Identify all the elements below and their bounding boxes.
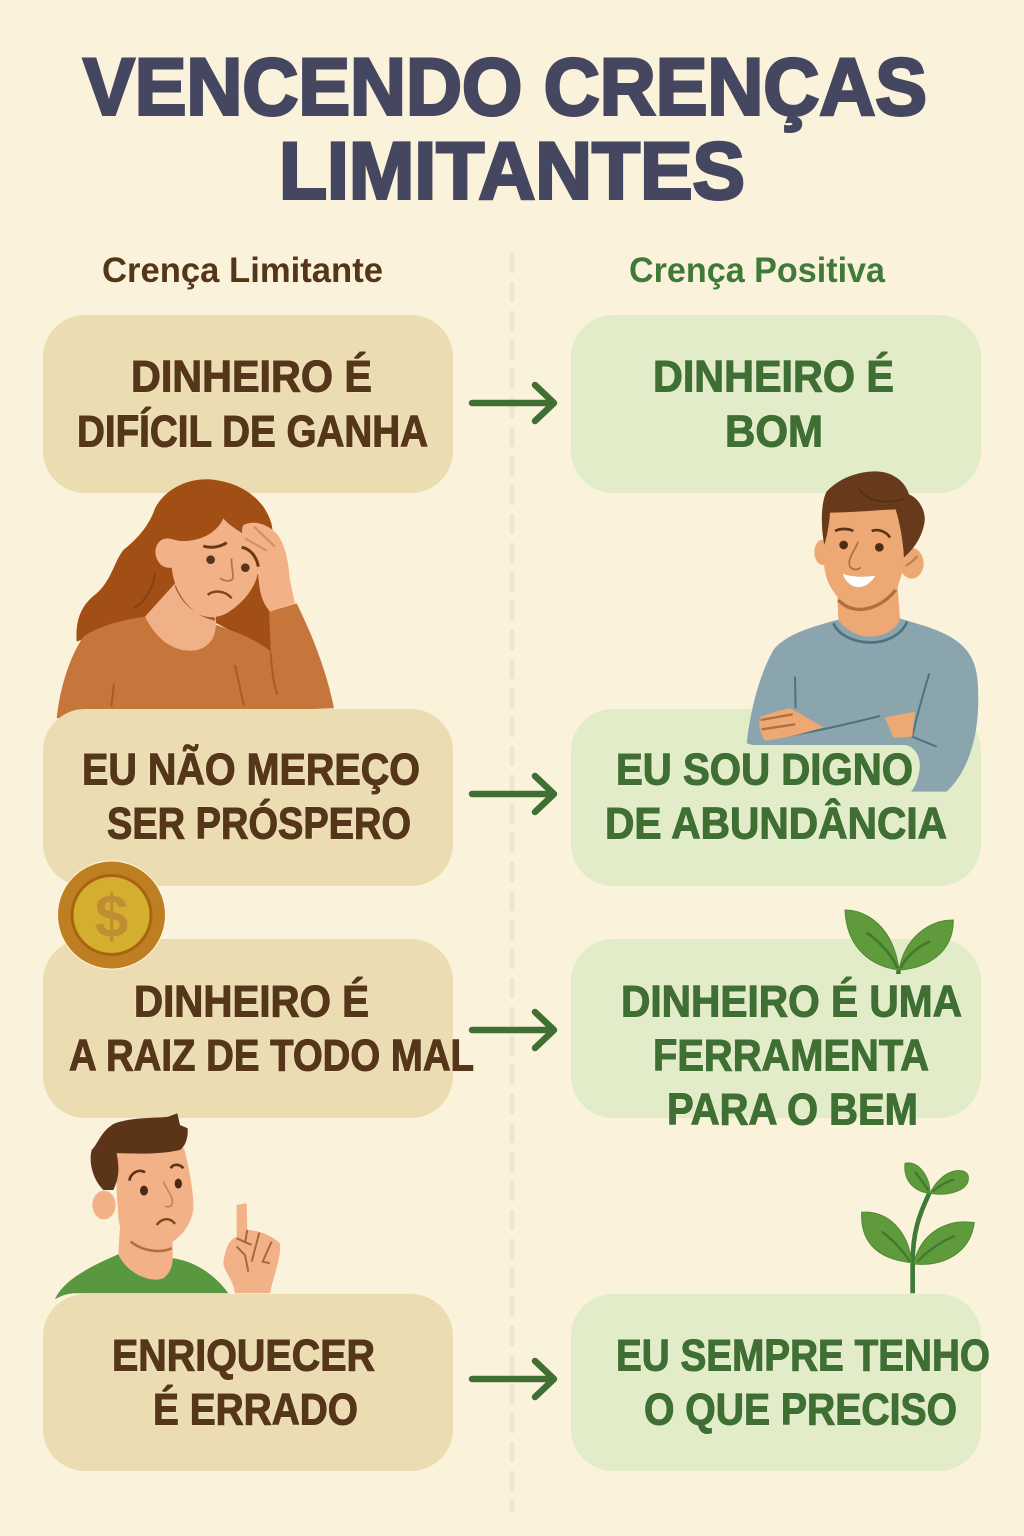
arrow row 1: [472, 385, 554, 421]
illustration: worried woman: [57, 479, 334, 718]
panel: limiting belief 4: É ERRADO: [153, 1384, 358, 1434]
panel: limiting belief 4: [43, 1294, 453, 1471]
panel: positive belief 1: [571, 315, 981, 493]
panel: positive belief 4: [571, 1294, 990, 1471]
heading: limiting belief column: Crença Limitante: [102, 251, 383, 290]
panel: limiting belief 1: DINHEIRO É: [131, 352, 372, 402]
panel: limiting belief 3: [43, 939, 474, 1118]
icon: two leaves: [845, 910, 953, 974]
panel: limiting belief 3: DINHEIRO É: [134, 976, 369, 1026]
arrow row 3: [472, 1012, 554, 1048]
title: [83, 42, 927, 216]
illustration: confident man: [747, 471, 978, 792]
heading: positive belief column: Crença Positiva: [629, 251, 886, 290]
panel: positive belief 1: DINHEIRO É: [653, 352, 894, 402]
icon: sprout: [862, 1163, 974, 1293]
illustration: doubtful man pointing: [55, 1113, 280, 1299]
panel: positive belief 3: [571, 939, 981, 1134]
title: VENCENDO CRENÇAS: [83, 42, 927, 132]
panel: positive belief 3: DINHEIRO É UMA: [621, 976, 962, 1026]
panel: limiting belief 1: [43, 315, 453, 493]
arrow row 2: [472, 776, 554, 812]
icon: gold coin: [58, 861, 166, 969]
panel: limiting belief 2: EU NÃO MEREÇO: [82, 744, 420, 794]
text: positive belief 2: [605, 746, 947, 848]
panel: limiting belief 1: DIFÍCIL DE GANHA: [77, 406, 428, 456]
text: positive belief 2: DE ABUNDÂNCIA: [605, 798, 947, 848]
arrow row 4: [472, 1361, 554, 1397]
panel: limiting belief 2: [43, 709, 453, 886]
panel: limiting belief 2: SER PRÓSPERO: [107, 798, 411, 848]
panel: limiting belief 4: ENRIQUECER: [112, 1332, 375, 1380]
panel: positive belief 4: O QUE PRECISO: [644, 1386, 957, 1434]
panel: positive belief 3: FERRAMENTA: [653, 1032, 929, 1080]
panel: positive belief 1: BOM: [725, 408, 823, 456]
panel: positive belief 2: [571, 709, 981, 886]
icon: gold coin: $: [95, 883, 128, 950]
panel: limiting belief 3: A RAIZ DE TODO MAL: [69, 1032, 474, 1080]
panel: positive belief 3: PARA O BEM: [667, 1086, 918, 1134]
text backing cut-out over sleeve: [745, 745, 920, 793]
title: LIMITANTES: [279, 126, 745, 216]
text: positive belief 2: EU SOU DIGNO: [616, 746, 913, 794]
